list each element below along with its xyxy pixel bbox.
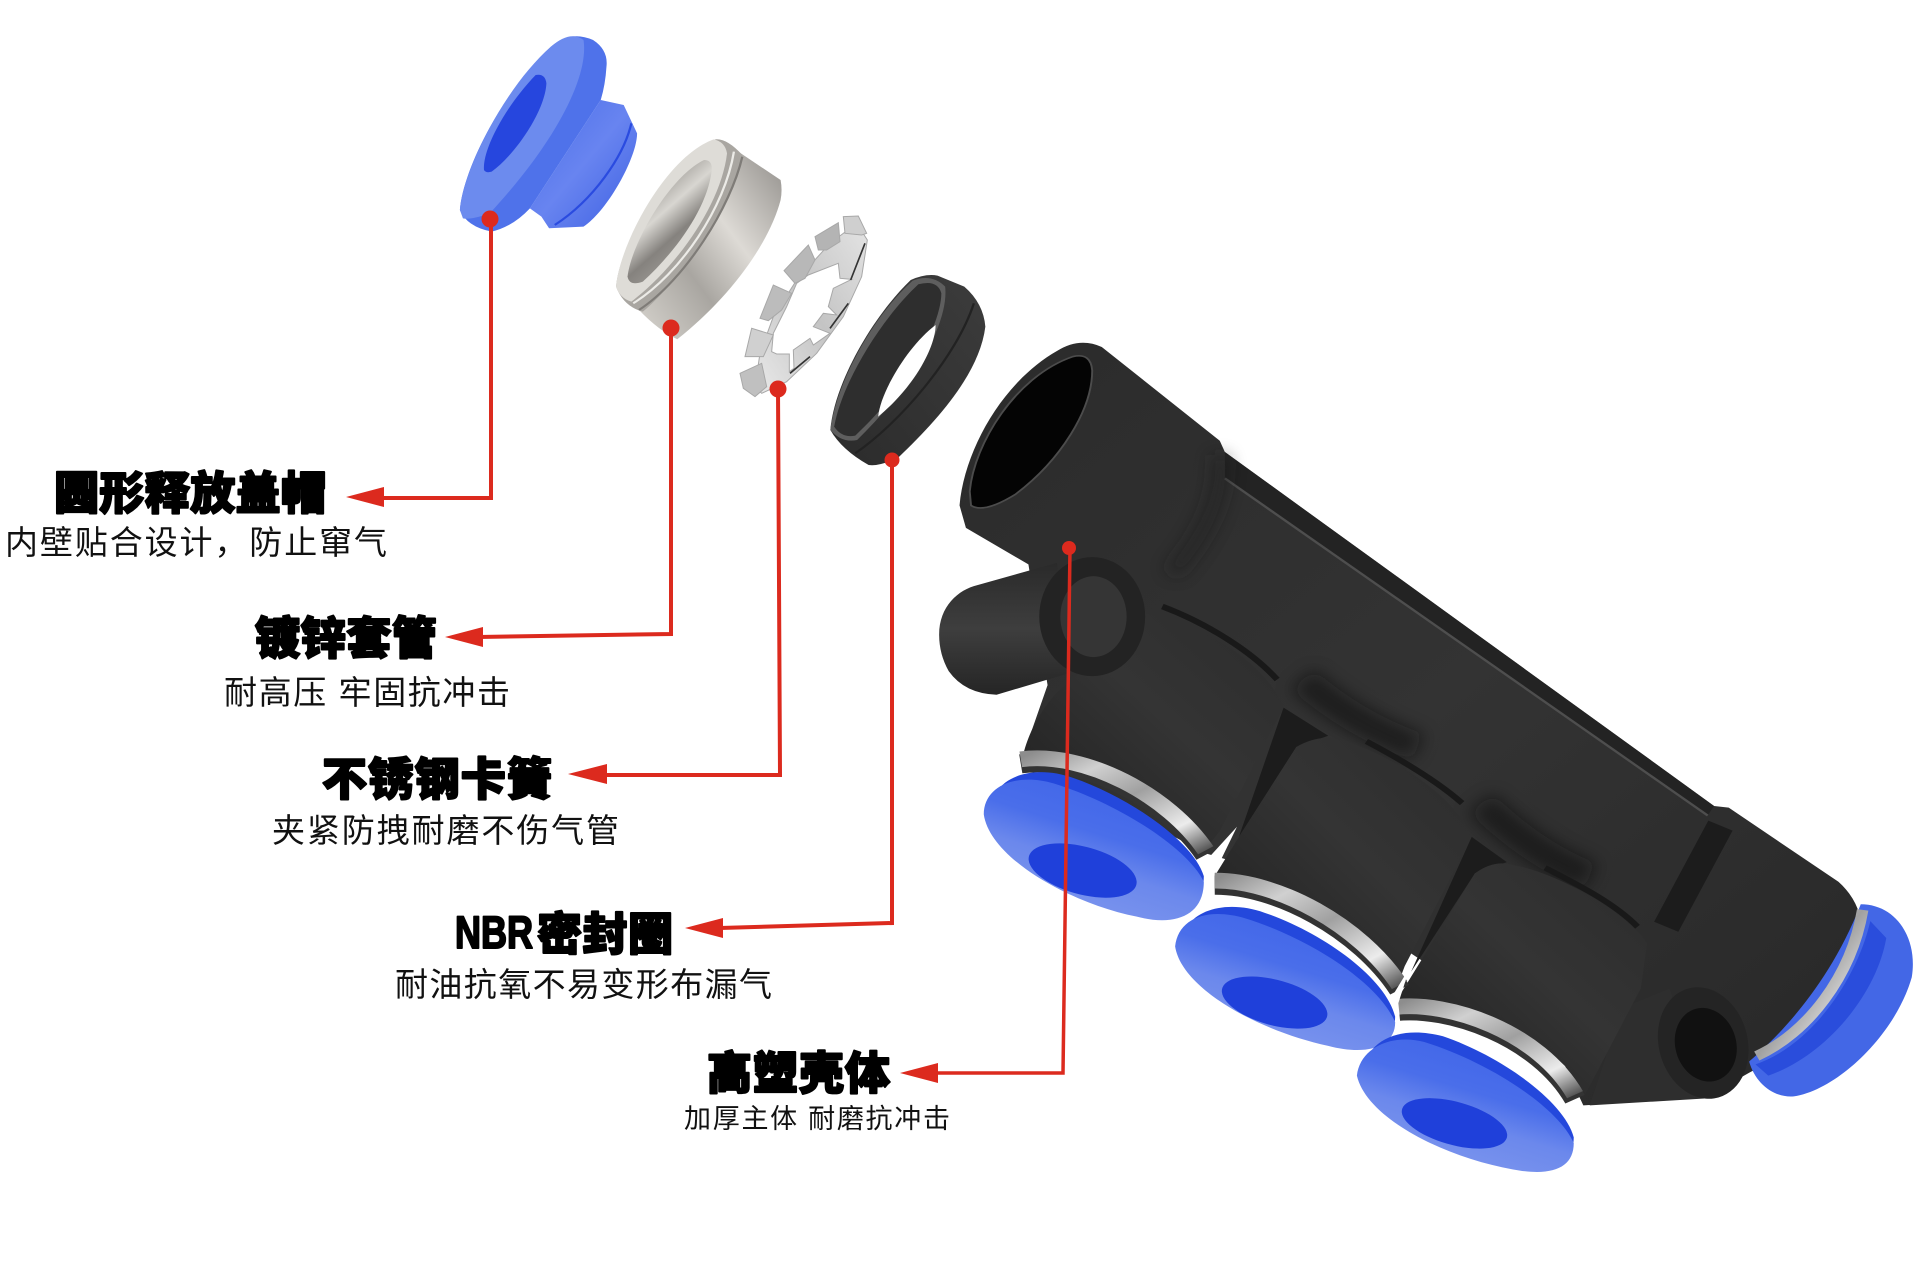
part: NBR seal ring bbox=[830, 275, 985, 465]
white gaps between ports bbox=[1193, 827, 1410, 1035]
label: NBR seal ring: 耐油抗氧不易变形布漏气 bbox=[395, 966, 772, 1003]
left side stub bbox=[939, 557, 1145, 695]
label: NBR seal ring: NBR bbox=[455, 907, 533, 958]
blue cap: port 3 bbox=[1357, 1033, 1574, 1172]
metal rings bbox=[1021, 758, 1575, 1099]
label: galvanized sleeve: 镀锌套管 bbox=[255, 613, 437, 664]
callout line 4 bbox=[685, 452, 900, 938]
part: galvanized sleeve bbox=[616, 139, 782, 339]
label: round release cap: 内壁贴合设计，防止窜气 bbox=[5, 524, 387, 561]
right lower stub bbox=[1590, 981, 1758, 1105]
label: high plastic shell: 加厚主体 耐磨抗冲击 bbox=[684, 1104, 950, 1134]
port tubes bbox=[1022, 607, 1647, 1098]
blue cap: right end bbox=[1749, 904, 1913, 1097]
label: galvanized sleeve: 耐高压 牢固抗冲击 bbox=[224, 674, 510, 711]
part: stainless steel retaining clip bbox=[740, 216, 867, 397]
label: high plastic shell: 高塑壳体 bbox=[707, 1048, 890, 1099]
label: round release cap: 圆形释放盖帽 bbox=[54, 468, 326, 519]
label: NBR seal ring bbox=[395, 907, 772, 1003]
callout line 3 bbox=[568, 380, 786, 784]
callout line 2 bbox=[445, 320, 680, 647]
label: high plastic shell bbox=[684, 1048, 950, 1134]
blue cap: port 1 bbox=[984, 772, 1204, 920]
label: stainless steel clip bbox=[272, 754, 619, 849]
part: blue release cap bbox=[460, 36, 637, 232]
main manifold body bbox=[939, 343, 1913, 1172]
callout line 5 bbox=[900, 541, 1076, 1083]
blue cap: port 2 bbox=[1175, 907, 1395, 1050]
label: NBR seal ring: 密封圈 bbox=[537, 909, 673, 960]
callout line 1 bbox=[346, 210, 498, 507]
top opening bbox=[970, 356, 1092, 508]
label: round release cap bbox=[5, 468, 387, 561]
label: stainless steel clip: 不锈钢卡簧 bbox=[322, 754, 552, 805]
label: stainless steel clip: 夹紧防拽耐磨不伤气管 bbox=[272, 812, 619, 849]
label: galvanized sleeve bbox=[224, 613, 510, 711]
